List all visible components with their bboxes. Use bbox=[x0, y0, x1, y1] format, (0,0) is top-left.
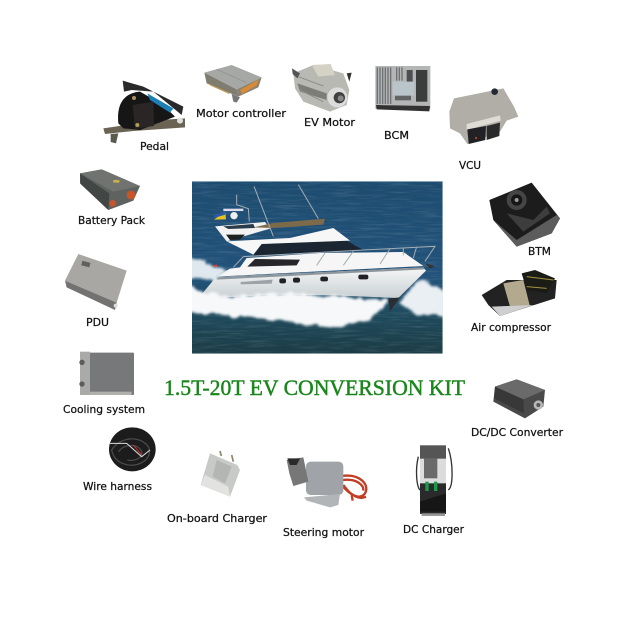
label: DC/DC Converter: DC/DC Converter bbox=[471, 426, 563, 439]
label: EV Motor: EV Motor bbox=[304, 116, 355, 129]
label: Air compressor: Air compressor bbox=[471, 321, 551, 334]
infographic canvas bbox=[64, 64, 564, 538]
component: DC charger bbox=[403, 445, 464, 536]
component: steering motor bbox=[283, 457, 366, 539]
center photo: motor yacht on the water bbox=[188, 181, 448, 354]
label: Pedal: Pedal bbox=[140, 140, 169, 153]
component: motor controller bbox=[196, 65, 286, 120]
component: PDU bbox=[65, 254, 127, 329]
component: air compressor bbox=[471, 270, 557, 334]
label: PDU: PDU bbox=[86, 316, 109, 329]
component: BTM bbox=[489, 183, 560, 258]
label: Steering motor: Steering motor bbox=[283, 526, 364, 539]
component: DC/DC converter bbox=[471, 379, 563, 439]
label: DC Charger: DC Charger bbox=[403, 523, 464, 536]
label: Battery Pack: Battery Pack bbox=[78, 214, 146, 227]
label: On-board Charger: On-board Charger bbox=[167, 512, 267, 525]
component: wire harness bbox=[83, 427, 156, 493]
component: BCM bbox=[375, 66, 430, 142]
component: cooling system bbox=[63, 352, 145, 416]
component: on-board charger bbox=[167, 451, 267, 525]
component: EV motor bbox=[292, 64, 355, 129]
label: Motor controller: Motor controller bbox=[196, 107, 286, 120]
component: VCU bbox=[449, 88, 518, 172]
label: BTM: BTM bbox=[528, 245, 551, 258]
label: BCM: BCM bbox=[384, 129, 409, 142]
label: Cooling system: Cooling system bbox=[63, 403, 145, 416]
component: pedal bbox=[103, 81, 185, 153]
component: battery pack bbox=[78, 169, 146, 227]
title: 1.5T-20T EV CONVERSION KIT bbox=[164, 375, 466, 400]
label: VCU: VCU bbox=[459, 159, 481, 172]
label: Wire harness: Wire harness bbox=[83, 480, 152, 493]
